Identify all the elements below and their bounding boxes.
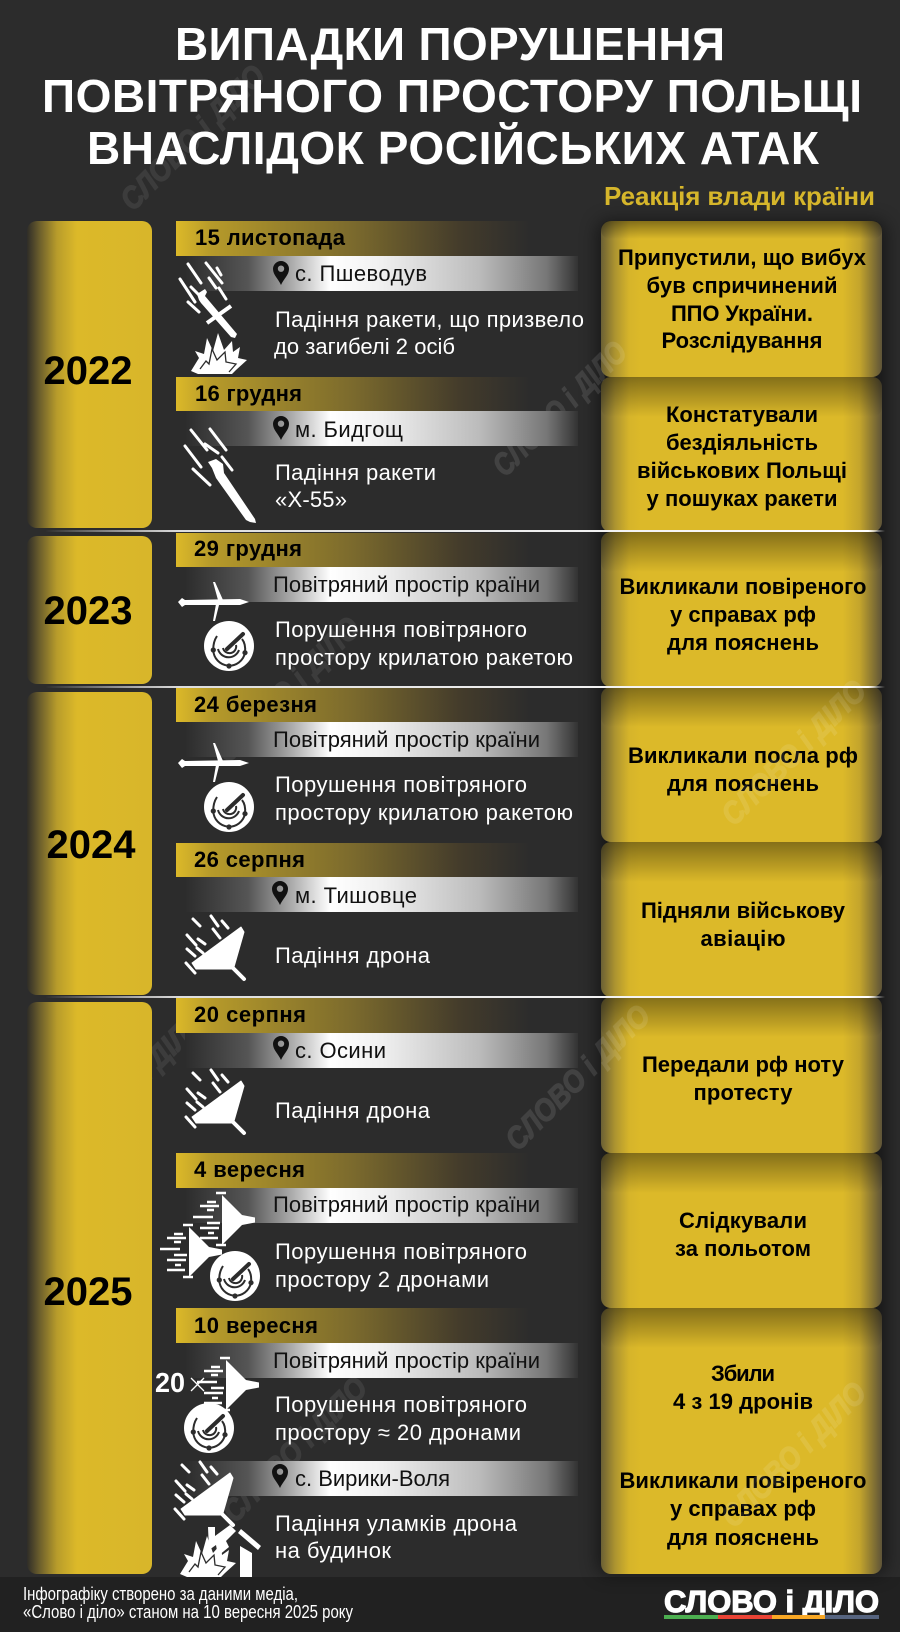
event: 16 грудня: 16 грудня: [195, 381, 302, 406]
event: 10 вересня: Падіння уламків дрона: [275, 1511, 518, 1536]
reaction: 29 грудня: [601, 532, 882, 687]
watermarks over panels: СЛОВО і ДІЛО: [485, 334, 634, 483]
year: 2025: 2025: [44, 1270, 132, 1314]
event: 20 серпня: с. Осини: [295, 1038, 386, 1063]
icon: falling drone: [186, 916, 244, 979]
reaction: 26 серпня: [601, 842, 882, 997]
reaction: Бидгощ: у пошуках ракети: [646, 486, 838, 511]
event: 24 березня: простору крилатою ракетою: [275, 800, 573, 825]
divider 2024 / 2025: [45, 996, 885, 998]
reaction: Бидгощ: військових Польщі: [637, 458, 847, 483]
event: 24 березня: Порушення повітряного: [275, 772, 527, 797]
reaction: Бидгощ: бездіяльність: [666, 430, 818, 455]
icon: cruise missile and radar: [178, 743, 254, 832]
event: 10 вересня: с. Вирики-Воля: [295, 1466, 450, 1491]
event: 16 грудня: Падіння ракети: [275, 460, 436, 485]
year: 2023: 2023: [44, 589, 132, 633]
reaction: 10 вересня: для пояснень: [667, 1525, 819, 1550]
watermarks over panels: СЛОВО і ДІЛО: [714, 1375, 873, 1534]
event: 4 вересня: Повітряний простір країни: [273, 1192, 540, 1217]
reaction: 10 вересня: Викликали повіреного: [620, 1468, 866, 1493]
icon: falling drone on house: [175, 1462, 261, 1577]
event: 29 грудня: Порушення повітряного: [275, 617, 527, 642]
event: 15 листопада: [176, 221, 584, 374]
title: ВИПАДКИ ПОРУШЕННЯ: [175, 18, 725, 70]
icon: falling missile: [185, 429, 256, 523]
event: 16 грудня: «Х-55»: [275, 487, 347, 512]
title: [42, 18, 862, 174]
reaction: 20 серпня: Передали рф ноту: [642, 1052, 845, 1077]
event: 29 грудня: Повітряний простір країни: [273, 572, 540, 597]
event: 16 грудня: [176, 377, 578, 523]
reaction: 24 березня: [601, 687, 882, 842]
year: 2025: [27, 1002, 152, 1574]
source note: Інфографіку створено за даними медіа,: [23, 1584, 298, 1604]
reaction: 10 вересня: Збили: [711, 1361, 775, 1386]
event: 4 вересня: Порушення повітряного: [275, 1239, 527, 1264]
event: 24 березня: Повітряний простір країни: [273, 727, 540, 752]
source note: [23, 1584, 353, 1622]
year: 2024: 2024: [47, 823, 136, 867]
event: 4 вересня: 4 вересня: [194, 1157, 305, 1182]
reaction: Пшеводув: Розслідування: [662, 328, 822, 353]
event: 20 серпня: Падіння дрона: [275, 1098, 431, 1123]
reaction: Пшеводув: [601, 221, 882, 377]
event: 10 вересня: Порушення повітряного: [275, 1392, 527, 1417]
event: 15 листопада: с. Пшеводув: [295, 261, 427, 286]
event: 24 березня: 24 березня: [194, 692, 317, 717]
reaction: Пшеводув: був спричинений: [646, 273, 838, 298]
watermarks: СЛОВО і ДІЛО: [53, 1003, 212, 1162]
reaction: Пшеводув: ППО України.: [671, 301, 813, 326]
reaction: 20 серпня: протесту: [694, 1080, 793, 1105]
divider 2022 / 2023: [45, 530, 885, 532]
event: 29 грудня: 29 грудня: [194, 536, 302, 561]
event: 4 вересня: простору 2 дронами: [275, 1267, 489, 1292]
event: 26 серпня: Падіння дрона: [275, 943, 431, 968]
event: 15 листопада: 15 листопада: [195, 225, 346, 250]
reaction: 29 грудня: для пояснень: [667, 630, 819, 655]
title: ПОВІТРЯНОГО ПРОСТОРУ ПОЛЬЩІ: [42, 70, 862, 122]
reaction: 4 вересня: [601, 1153, 882, 1308]
watermarks over panels: СЛОВО і ДІЛО: [714, 673, 873, 832]
reaction: Бидгощ: Констатували: [666, 402, 818, 427]
box shadows: [598, 221, 886, 1574]
event: 10 вересня: простору ≈ 20 дронами: [275, 1420, 521, 1445]
reaction: 26 серпня: авіацію: [700, 926, 786, 951]
event: 20 серпня: 20 серпня: [194, 1002, 306, 1027]
reaction: 4 вересня: Слідкували: [679, 1208, 807, 1233]
event: 15 листопада: Падіння ракети, що призвело: [275, 307, 584, 332]
reaction: 10 вересня: [601, 1308, 882, 1574]
reaction: 26 серпня: Підняли військову: [641, 898, 846, 923]
event: 16 грудня: м. Бидгощ: [295, 417, 403, 442]
year: 2023: [27, 536, 152, 684]
watermarks over panels: [485, 334, 873, 1534]
reaction: 4 вересня: за польотом: [675, 1236, 811, 1261]
event: 4 вересня: [160, 1153, 578, 1301]
icon: falling drone: [186, 1070, 244, 1133]
watermarks: [53, 58, 374, 1529]
event: 29 грудня: [176, 533, 578, 671]
event: 15 листопада: до загибелі 2 осіб: [274, 334, 455, 359]
event: 10 вересня: [155, 1308, 578, 1577]
year: 2024: [27, 692, 152, 995]
event: 10 вересня: 10 вересня: [194, 1313, 318, 1338]
year: 2022: [27, 221, 152, 528]
watermarks over panels: СЛОВО і ДІЛО: [498, 998, 657, 1157]
reaction: 29 грудня: у справах рф: [670, 602, 816, 627]
reaction: 10 вересня: у справах рф: [670, 1496, 816, 1521]
event: 10 вересня: Повітряний простір країни: [273, 1348, 540, 1373]
event: 24 березня: [176, 688, 578, 832]
column heading: reaction: Реакція влади країни: [604, 181, 875, 211]
logo: СЛОВО і ДІЛО: [664, 1584, 879, 1619]
divider 2023 / 2024: [45, 686, 885, 688]
event: 26 серпня: [176, 843, 578, 979]
reaction: 10 вересня: 4 з 19 дронів: [673, 1389, 813, 1414]
icon: cruise missile and radar: [178, 582, 254, 671]
reaction: 24 березня: Викликали посла рф: [628, 743, 858, 768]
icon: 20 drones and radar: [155, 1358, 259, 1453]
reaction: Бидгощ: [601, 377, 882, 532]
icon: falling rocket with explosion: [180, 263, 247, 374]
event: 29 грудня: простору крилатою ракетою: [275, 645, 573, 670]
reaction: 29 грудня: Викликали повіреного: [620, 574, 866, 599]
icon: 20 drones and radar: 20: [155, 1367, 185, 1398]
watermarks: СЛОВО і ДІЛО: [215, 1370, 374, 1529]
event: 20 серпня: [176, 998, 578, 1133]
reaction: Пшеводув: Припустили, що вибух: [618, 245, 867, 270]
event: 26 серпня: 26 серпня: [194, 847, 305, 872]
reaction: 24 березня: для пояснень: [667, 771, 819, 796]
icon: two drones and radar: [160, 1193, 260, 1301]
watermarks: СЛОВО і ДІЛО: [208, 610, 367, 769]
source note: «Слово і діло» станом на 10 вересня 2025 року: [23, 1602, 353, 1622]
year: 2022: 2022: [44, 349, 132, 393]
title: ВНАСЛІДОК РОСІЙСЬКИХ АТАК: [87, 122, 820, 174]
reaction: 20 серпня: [601, 997, 882, 1153]
event: 26 серпня: м. Тишовце: [295, 883, 417, 908]
watermarks: СЛОВО і ДІЛО: [113, 58, 272, 217]
event: 10 вересня: на будинок: [275, 1538, 391, 1563]
